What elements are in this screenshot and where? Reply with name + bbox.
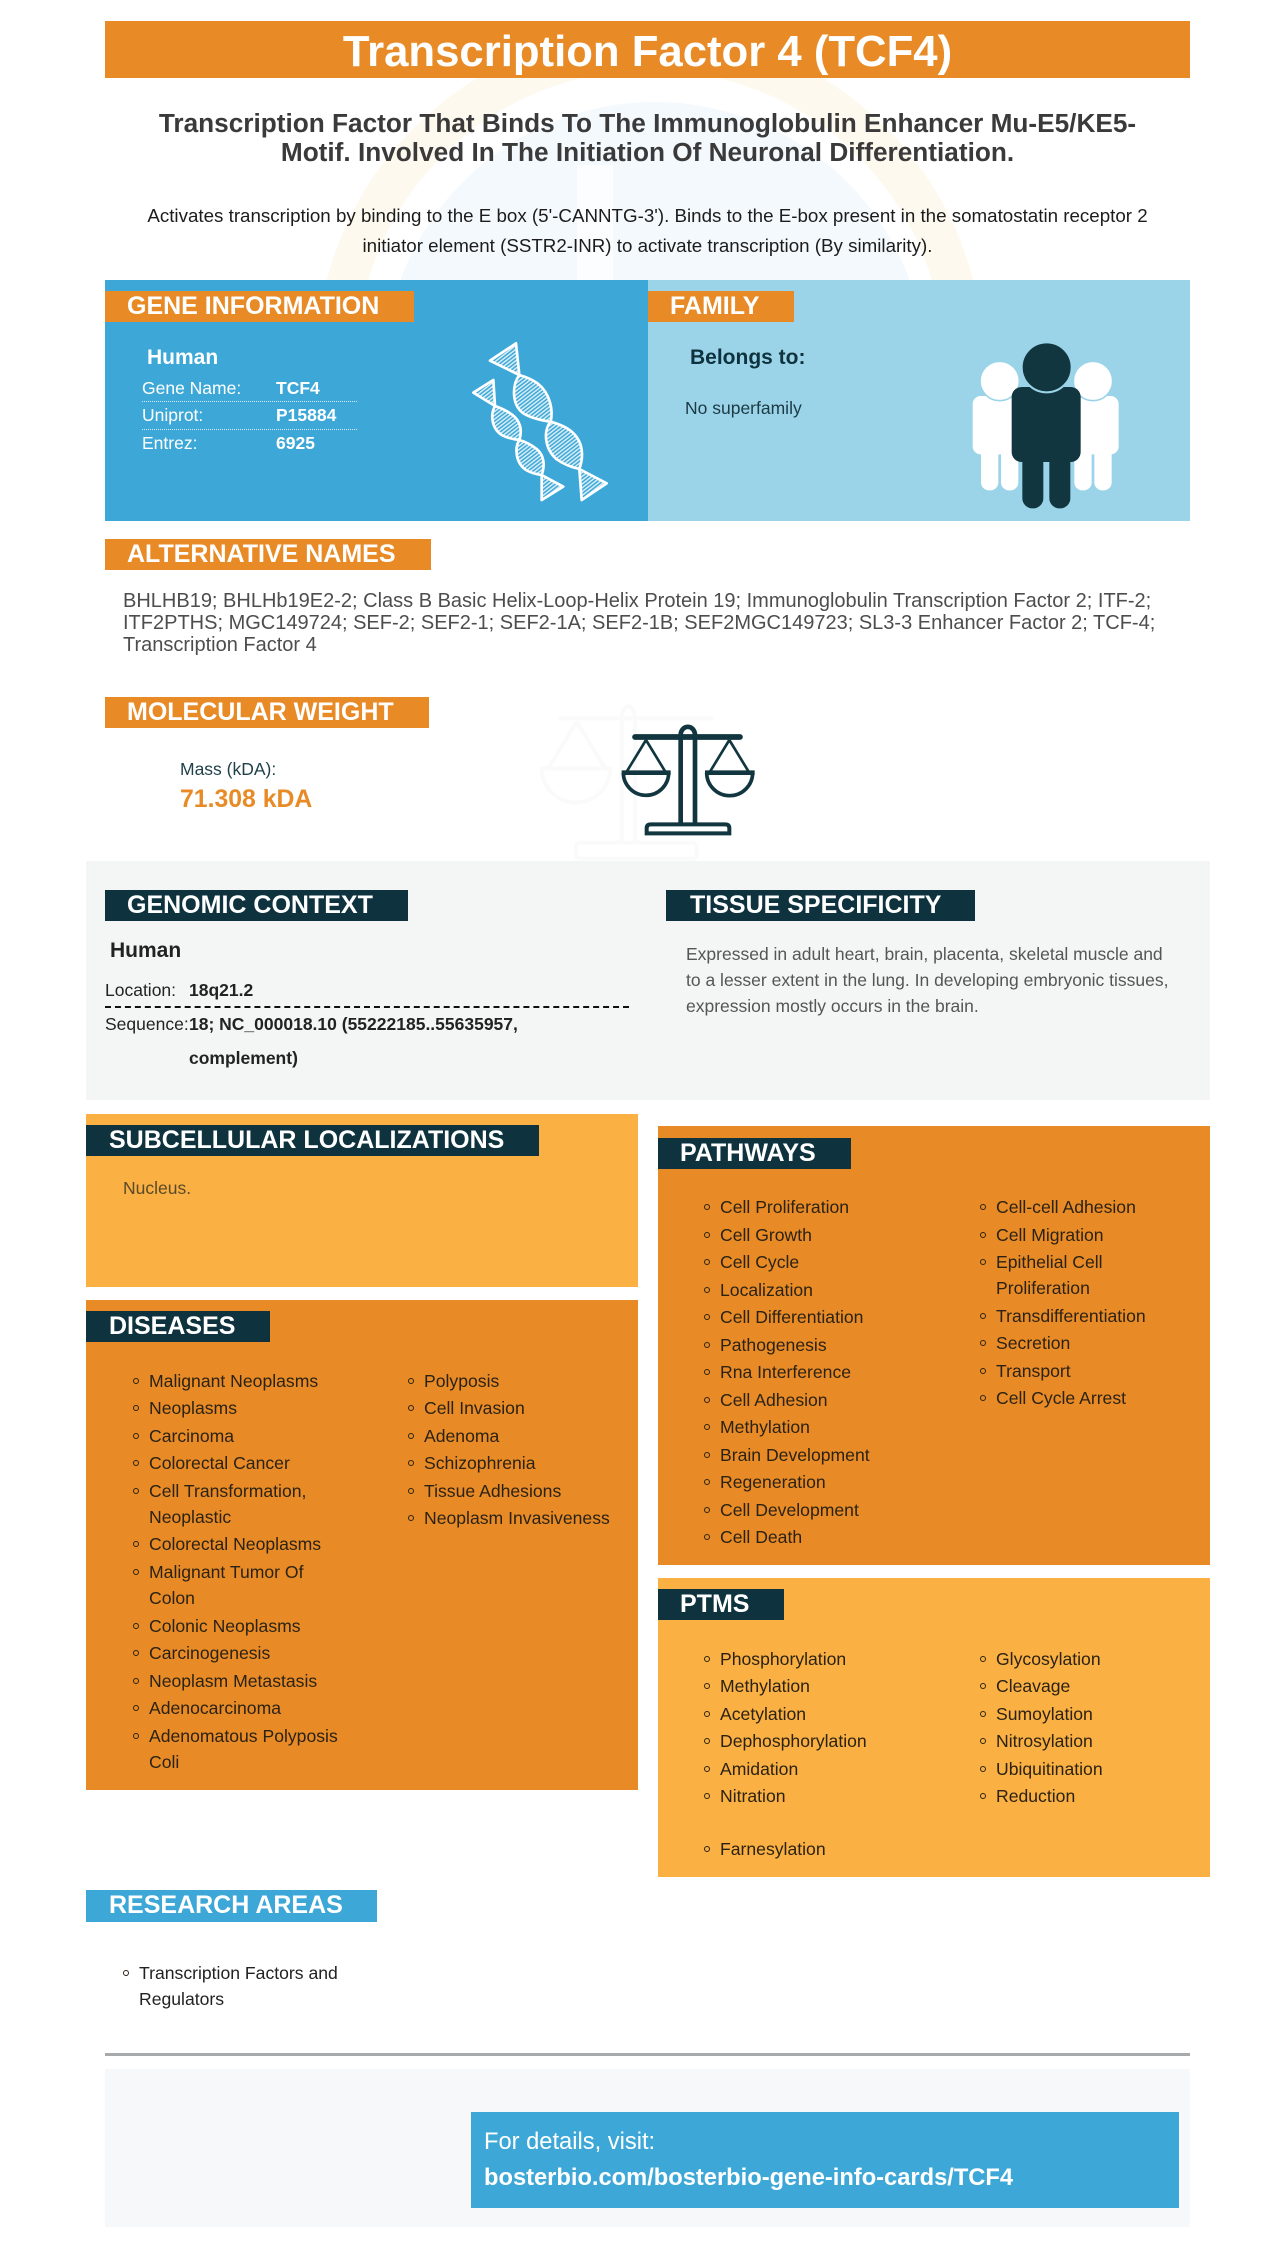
pathways column 1: Cell Development xyxy=(720,1500,859,1520)
diseases column 2: Cell Invasion xyxy=(424,1398,525,1418)
pathways column 2: Transport xyxy=(996,1361,1071,1381)
ptms column 2: Sumoylation xyxy=(996,1704,1093,1724)
diseases column 1: Colon xyxy=(149,1588,195,1608)
research areas list xyxy=(139,1960,338,2012)
heading: molecular weight: MOLECULAR WEIGHT xyxy=(127,698,394,726)
pathways column 1 xyxy=(704,1197,870,1547)
pathways column 1: Cell Cycle xyxy=(720,1252,799,1272)
ptms column 1 xyxy=(704,1649,867,1859)
ptms column 2: Nitrosylation xyxy=(996,1731,1093,1751)
tissue text: Expressed in adult heart, brain, placenta, skeletal muscle and xyxy=(686,944,1163,964)
pathways column 1: Cell Death xyxy=(720,1527,802,1547)
mass value: 71.308 kDA xyxy=(180,786,312,813)
callout: details link xyxy=(471,2112,1179,2208)
diseases column 2: Polyposis xyxy=(424,1371,499,1391)
diseases column 1: Carcinoma xyxy=(149,1426,234,1446)
diseases column 1: Colonic Neoplasms xyxy=(149,1616,301,1636)
location: 18q21.2 xyxy=(189,980,253,1000)
pathways column 2: Cell-cell Adhesion xyxy=(996,1197,1136,1217)
divider xyxy=(105,1006,629,1008)
diseases column 2: Tissue Adhesions xyxy=(424,1481,561,1501)
diseases column 2: Adenoma xyxy=(424,1426,499,1446)
species: Human xyxy=(147,346,218,369)
panel: family xyxy=(648,280,1190,521)
ptms column 2: Cleavage xyxy=(996,1676,1070,1696)
location: Location: xyxy=(105,980,176,1000)
sequence: 18; NC_000018.10 (55222185..55635957, xyxy=(189,1014,518,1034)
tissue text: to a lesser extent in the lung. In developing embryonic tissues, xyxy=(686,970,1168,990)
subtitle: Motif. Involved In The Initiation Of Neuronal Differentiation. xyxy=(281,137,1014,167)
location xyxy=(105,980,253,1000)
belongs to label: Belongs to: xyxy=(690,346,806,369)
heading: ptms: PTMS xyxy=(680,1590,749,1618)
panel: pathways xyxy=(658,1126,1210,1565)
visit label: For details, visit: xyxy=(484,2129,655,2155)
title xyxy=(105,21,1190,78)
icon: dna xyxy=(472,342,608,502)
diseases column 1: Colorectal Neoplasms xyxy=(149,1534,321,1554)
description: initiator element (SSTR2-INR) to activate transcription (By similarity). xyxy=(363,235,932,256)
family value: No superfamily xyxy=(685,398,802,418)
ptms column 1: Amidation xyxy=(720,1759,798,1779)
pathways column 1: Regeneration xyxy=(720,1472,826,1492)
icon: people xyxy=(972,343,1119,508)
heading: family xyxy=(648,291,794,322)
pathways column 1: Pathogenesis xyxy=(720,1335,827,1355)
diseases column 1: Malignant Neoplasms xyxy=(149,1371,318,1391)
diseases column 1: Cell Transformation, xyxy=(149,1481,306,1501)
description: Activates transcription by binding to the E box (5'-CANNTG-3'). Binds to the E-box present in the somatostatin receptor 2 xyxy=(147,205,1148,226)
heading: tissue specificity: TISSUE SPECIFICITY xyxy=(690,891,941,919)
title: Transcription Factor 4 (TCF4) xyxy=(343,27,952,76)
pathways column 2: Secretion xyxy=(996,1333,1070,1353)
diseases column 1: Carcinogenesis xyxy=(149,1643,270,1663)
pathways column 1: Localization xyxy=(720,1280,813,1300)
diseases column 1: Adenomatous Polyposis xyxy=(149,1726,338,1746)
panel: footer xyxy=(105,2069,1190,2227)
icon: scale xyxy=(622,724,755,836)
watermark logo xyxy=(327,78,973,280)
pathways column 1: Brain Development xyxy=(720,1445,870,1465)
pathways column 2: Transdifferentiation xyxy=(996,1306,1146,1326)
diseases column 1: Neoplasms xyxy=(149,1398,237,1418)
heading: diseases: DISEASES xyxy=(109,1312,235,1340)
ptms column 1: Dephosphorylation xyxy=(720,1731,867,1751)
entrez row: Entrez: xyxy=(142,433,197,453)
subtitle: Transcription Factor That Binds To The Immunoglobulin Enhancer Mu-E5/KE5- xyxy=(159,108,1136,138)
ptms column 1: Acetylation xyxy=(720,1704,806,1724)
panel: genomic context and tissue specificity xyxy=(86,861,1210,1100)
ptms column 2: Ubiquitination xyxy=(996,1759,1103,1779)
heading: alternative names: ALTERNATIVE NAMES xyxy=(127,540,396,568)
ptms column 2: Reduction xyxy=(996,1786,1075,1806)
sequence: complement) xyxy=(189,1048,298,1068)
ptms column 2 xyxy=(980,1649,1103,1806)
gene name row: Gene Name: xyxy=(142,378,241,398)
ptms column 1: Phosphorylation xyxy=(720,1649,846,1669)
diseases column 1 xyxy=(133,1371,338,1772)
diseases column 1: Malignant Tumor Of xyxy=(149,1562,304,1582)
pathways column 1: Rna Interference xyxy=(720,1362,851,1382)
ptms column 1: Farnesylation xyxy=(720,1839,826,1859)
sequence: Sequence: xyxy=(105,1014,189,1034)
subtitle xyxy=(159,108,1136,167)
diseases column 1: Coli xyxy=(149,1752,179,1772)
diseases column 1: Neoplastic xyxy=(149,1507,231,1527)
entrez row xyxy=(142,433,315,453)
pathways column 2: Proliferation xyxy=(996,1278,1090,1298)
uniprot row: P15884 xyxy=(276,405,336,425)
uniprot row xyxy=(142,402,357,430)
pathways column 1: Cell Adhesion xyxy=(720,1390,828,1410)
ptms column 2: Glycosylation xyxy=(996,1649,1101,1669)
heading: family: FAMILY xyxy=(670,292,759,320)
alternative names text: ITF2PTHS; MGC149724; SEF-2; SEF2-1; SEF2-1A; SEF2-1B; SEF2MGC149723; SL3-3 Enhancer Factor 2; TCF-4; xyxy=(123,612,1155,634)
heading: genomic context: GENOMIC CONTEXT xyxy=(127,891,373,919)
uniprot row: Uniprot: xyxy=(142,405,203,425)
heading: diseases xyxy=(86,1311,270,1342)
pathways column 1: Cell Growth xyxy=(720,1225,812,1245)
pathways column 1: Cell Differentiation xyxy=(720,1307,863,1327)
gene table xyxy=(142,378,357,453)
ptms column 1: Nitration xyxy=(720,1786,786,1806)
tissue text xyxy=(686,944,1168,1016)
diseases column 2: Neoplasm Invasiveness xyxy=(424,1508,610,1528)
divider xyxy=(105,2053,1190,2056)
heading: subcellular localizations: SUBCELLULAR LOCALIZATIONS xyxy=(109,1126,504,1154)
description xyxy=(147,205,1148,256)
pathways column 2: Epithelial Cell xyxy=(996,1252,1103,1272)
pathways column 1: Cell Proliferation xyxy=(720,1197,849,1217)
diseases column 1: Neoplasm Metastasis xyxy=(149,1671,317,1691)
panel: gene information xyxy=(105,280,648,521)
url: bosterbio.com/bosterbio-gene-info-cards/TCF4 xyxy=(484,2165,1013,2191)
research areas list: Regulators xyxy=(139,1989,224,2009)
panel: diseases xyxy=(86,1300,638,1790)
gene name row xyxy=(142,375,357,402)
panel: ptms xyxy=(658,1578,1210,1877)
heading: ptms xyxy=(658,1589,784,1620)
panel: subcellular localizations xyxy=(86,1114,638,1287)
gene name row: TCF4 xyxy=(276,378,320,398)
diseases column 1: Colorectal Cancer xyxy=(149,1453,290,1473)
ptms column 1: Methylation xyxy=(720,1676,810,1696)
alternative names text xyxy=(123,590,1155,656)
species: Human xyxy=(110,939,181,962)
heading: research areas: RESEARCH AREAS xyxy=(109,1891,343,1919)
diseases column 1: Adenocarcinoma xyxy=(149,1698,281,1718)
heading: gene information: GENE INFORMATION xyxy=(127,292,379,320)
entrez row: 6925 xyxy=(276,433,315,453)
localization text: Nucleus. xyxy=(123,1178,191,1198)
tissue text: expression mostly occurs in the brain. xyxy=(686,996,979,1016)
diseases column 2: Schizophrenia xyxy=(424,1453,536,1473)
sequence xyxy=(105,1014,518,1068)
alternative names text: BHLHB19; BHLHb19E2-2; Class B Basic Helix-Loop-Helix Protein 19; Immunoglobulin Transcription Factor 2; ITF-2; xyxy=(123,590,1151,612)
pathways column 2: Cell Migration xyxy=(996,1225,1104,1245)
diseases column 2 xyxy=(408,1371,610,1528)
heading: pathways: PATHWAYS xyxy=(680,1139,816,1167)
pathways column 1: Methylation xyxy=(720,1417,810,1437)
alternative names text: Transcription Factor 4 xyxy=(123,634,317,656)
heading: pathways xyxy=(658,1138,851,1169)
pathways column 2: Cell Cycle Arrest xyxy=(996,1388,1126,1408)
mass label: Mass (kDA): xyxy=(180,759,276,779)
research areas list: Transcription Factors and xyxy=(139,1963,338,1983)
pathways column 2 xyxy=(980,1197,1146,1408)
